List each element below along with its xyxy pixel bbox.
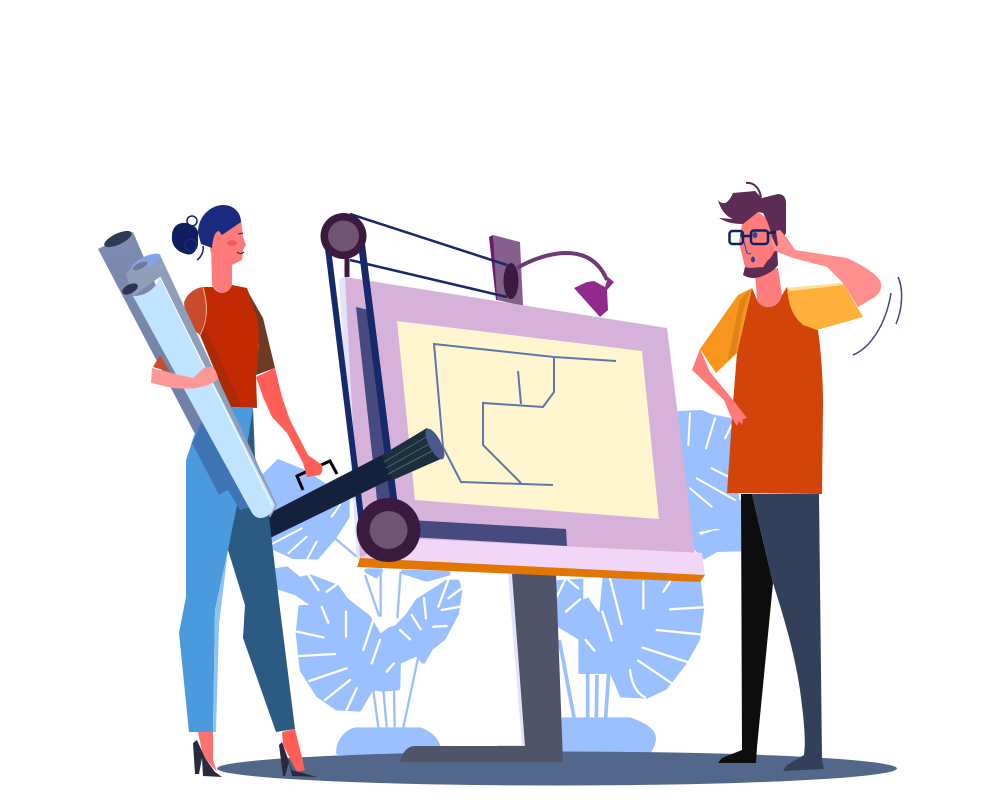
arm <box>262 455 393 539</box>
white notch in leaf <box>583 577 603 613</box>
arm end cap <box>422 426 448 462</box>
left ruler strip <box>356 307 393 500</box>
left sleeve <box>700 288 752 373</box>
blueprint lines <box>434 344 616 485</box>
left arm <box>692 349 747 426</box>
drafting board <box>339 235 705 582</box>
shirt <box>200 285 259 408</box>
board ledge <box>360 538 705 575</box>
neck and face <box>210 220 246 292</box>
board surface <box>345 277 695 558</box>
right arm <box>256 368 322 477</box>
hair <box>718 183 786 248</box>
rods <box>327 240 362 525</box>
hair bun <box>172 216 203 260</box>
back blueprint roll <box>98 228 232 472</box>
lamp post <box>489 235 523 306</box>
bottom wheel <box>356 498 420 562</box>
shirt <box>727 287 823 494</box>
face <box>739 212 779 272</box>
plant: left monstera <box>263 462 462 753</box>
right sleeve <box>787 283 863 330</box>
floor shadow <box>217 752 897 786</box>
drawing arm with grip <box>262 426 448 539</box>
beard <box>743 248 778 278</box>
left sleeve <box>153 287 207 372</box>
raised arm <box>772 230 881 307</box>
left leg and heel <box>193 732 222 777</box>
trousers <box>179 407 295 732</box>
desk lamp <box>504 253 614 317</box>
right sleeve <box>247 290 275 375</box>
drafting table stand <box>400 574 563 762</box>
man <box>692 183 902 771</box>
paper sheet <box>397 321 659 519</box>
top wheel <box>320 213 366 259</box>
motion lines <box>853 277 902 355</box>
left arm <box>151 367 218 389</box>
belts <box>350 214 507 297</box>
shirt shade <box>200 327 242 407</box>
woman <box>98 205 322 777</box>
ledge orange edge <box>357 558 705 582</box>
glasses <box>730 230 776 244</box>
board edge highlight <box>339 277 366 560</box>
hand on head <box>772 230 795 254</box>
bottom ruler strip <box>410 520 567 546</box>
hair <box>198 205 241 248</box>
drafting machine rods and wheels <box>320 213 507 562</box>
neck <box>755 268 782 307</box>
handle <box>297 461 337 490</box>
right leg and heel <box>279 729 317 777</box>
grip <box>382 428 443 480</box>
legs <box>718 494 824 771</box>
front blueprint roll <box>120 250 277 518</box>
plant: right monstera <box>557 412 742 753</box>
